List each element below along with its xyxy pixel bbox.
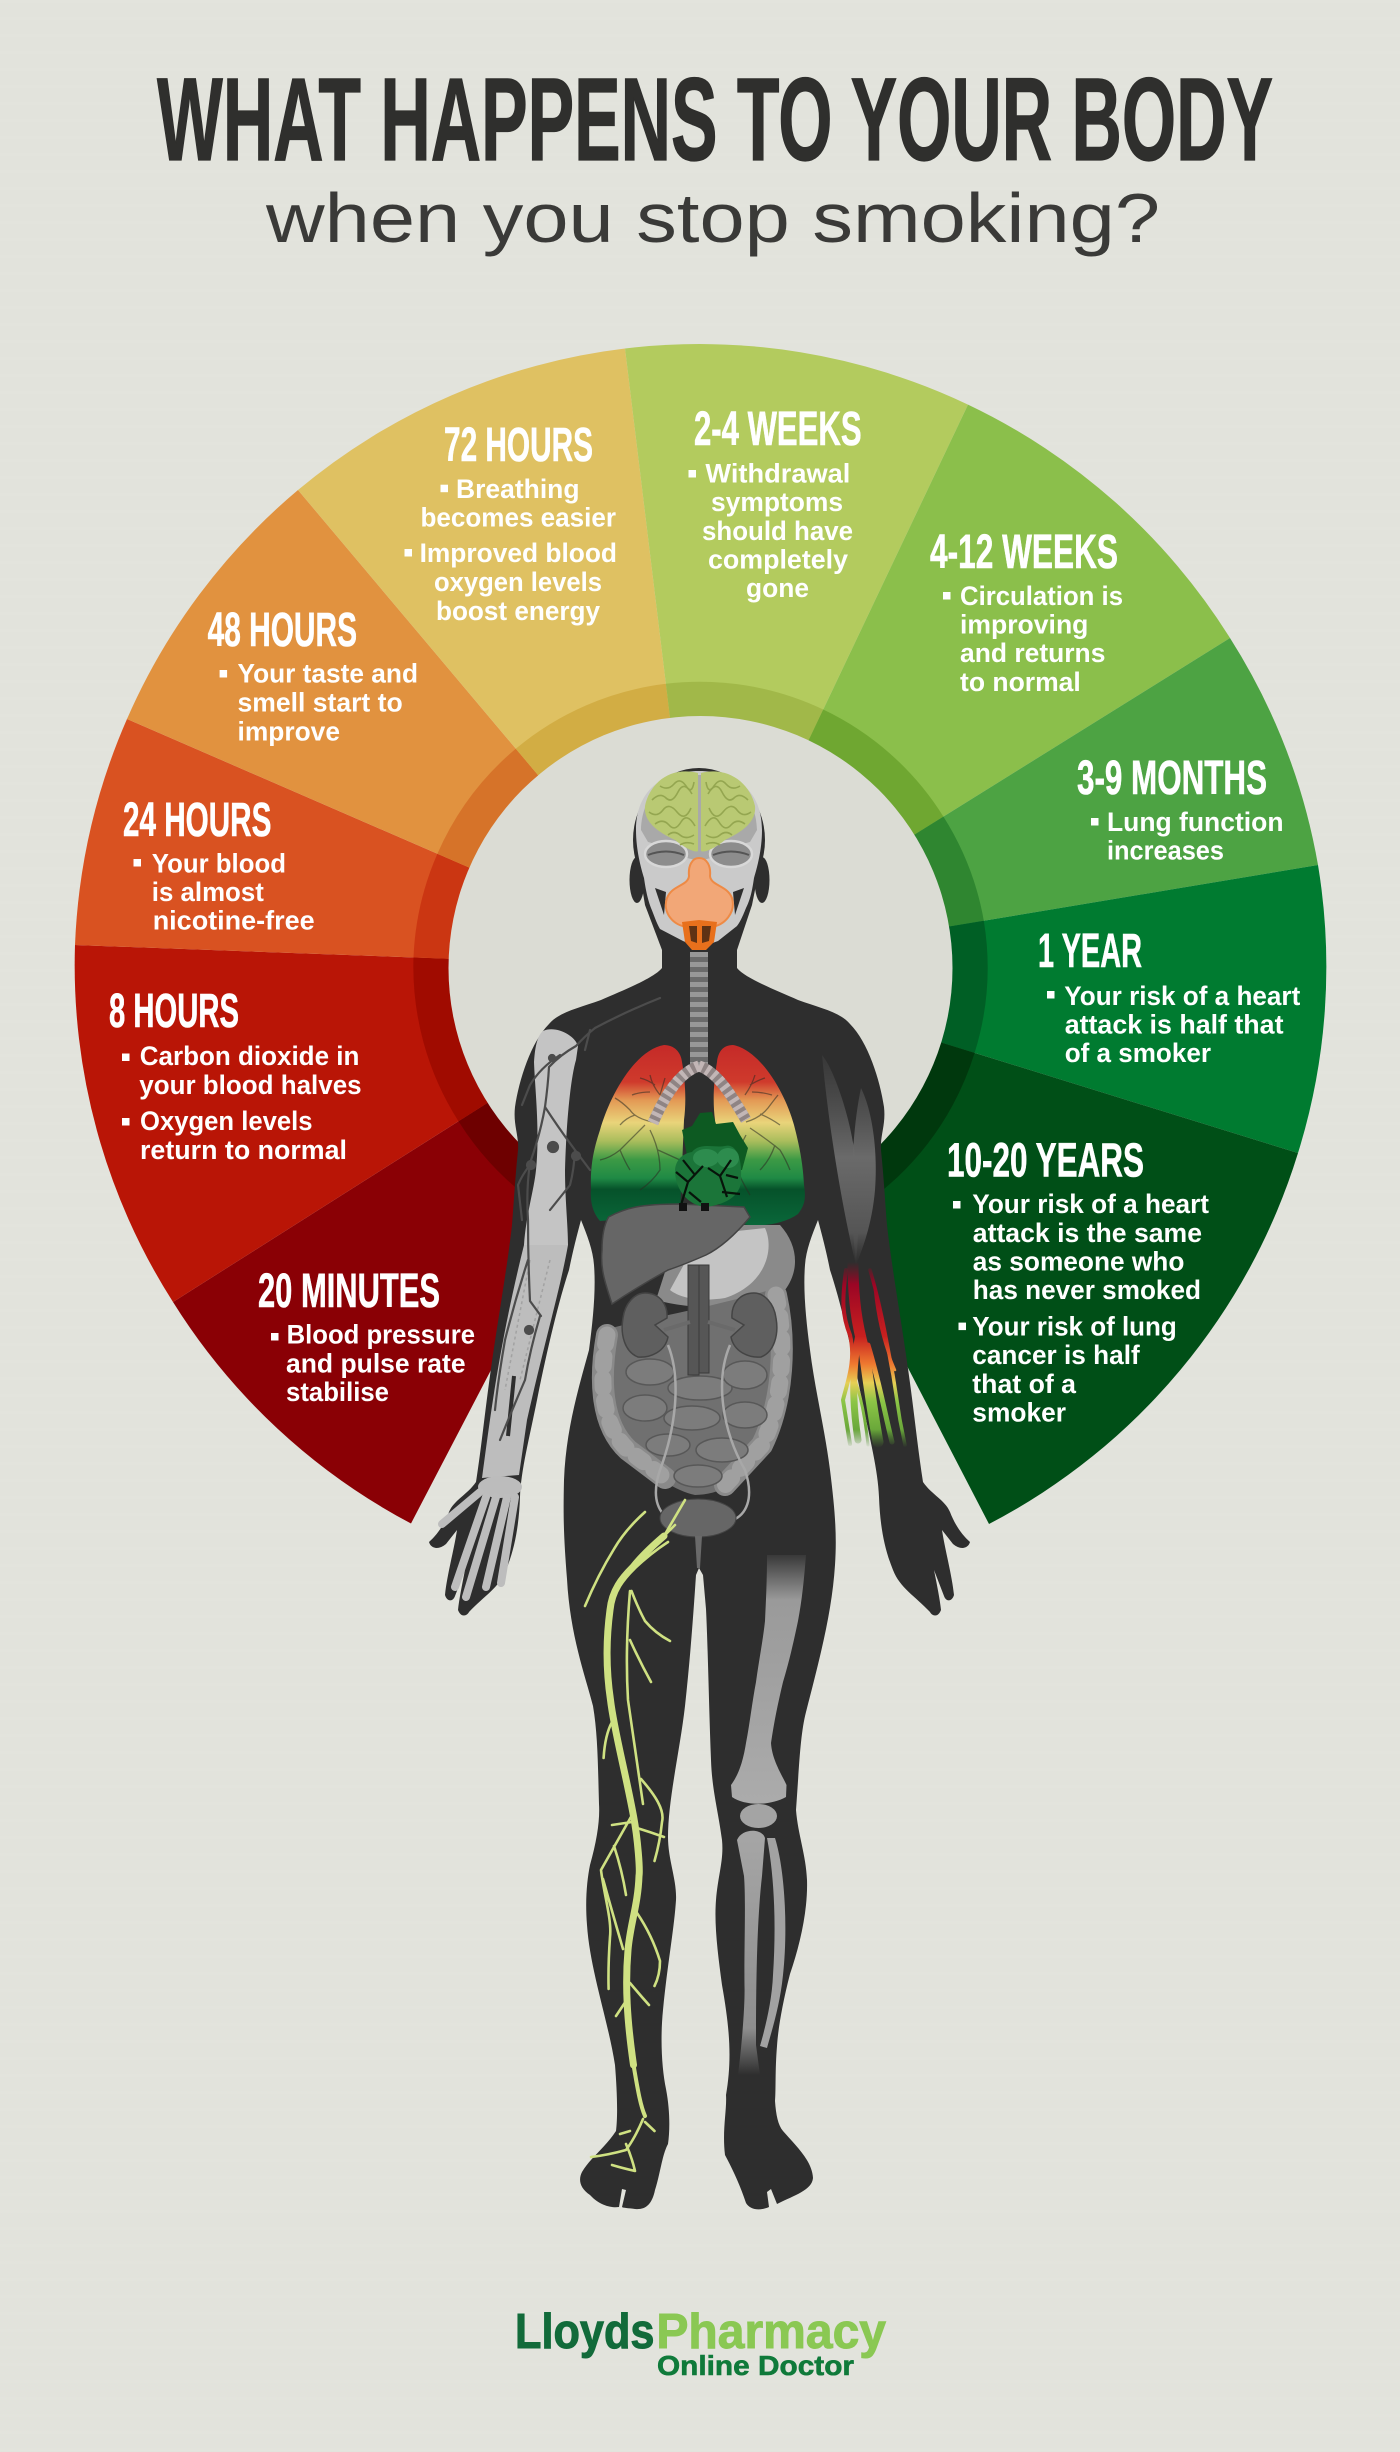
arm bones xyxy=(442,1029,578,1597)
heading: 10-20 years: 10-20 YEARS xyxy=(947,1134,1144,1188)
text: blood pressure: stabilise xyxy=(286,1377,389,1407)
bronchi xyxy=(653,1066,746,1123)
wedge: 48 hours xyxy=(127,490,700,968)
panel: 4-12 weeks xyxy=(700,405,1230,968)
text: carbon dioxide and oxygen: your blood halves xyxy=(139,1070,362,1100)
panel: 24 hours xyxy=(75,719,700,968)
text: long term risk: as someone who xyxy=(973,1247,1184,1277)
text: breathing and oxygen xyxy=(404,474,617,626)
wedge: 3-9 months xyxy=(700,638,1318,968)
text: taste and smell: Your taste and xyxy=(238,659,418,689)
tibia xyxy=(737,1831,765,2075)
text: withdrawal symptoms: completely xyxy=(708,544,848,574)
text: taste and smell xyxy=(220,659,418,746)
arm muscle xyxy=(822,1055,876,1265)
head and ears xyxy=(630,768,770,950)
text: carbon dioxide and oxygen: Oxygen levels xyxy=(140,1106,312,1136)
patella xyxy=(740,1804,777,1828)
wedge: 24 hours xyxy=(75,719,700,968)
text: blood pressure: and pulse rate xyxy=(286,1348,466,1378)
text: breathing and oxygen: boost energy xyxy=(436,596,600,626)
text: breathing and oxygen: Improved blood xyxy=(420,538,617,568)
text: long term risk: smoker xyxy=(972,1398,1066,1428)
stomach xyxy=(656,1225,795,1307)
logo: LloydsPharmacy xyxy=(515,2305,886,2359)
text: taste and smell: improve xyxy=(238,716,340,746)
text: long term risk: that of a xyxy=(972,1369,1077,1399)
panel: 2-4 weeks xyxy=(625,344,968,968)
femur xyxy=(731,1555,806,1804)
text: carbon dioxide and oxygen xyxy=(122,1041,362,1165)
logo: LloydsPharmacy: Pharmacy xyxy=(656,2305,886,2359)
small intestine xyxy=(623,1359,767,1487)
body silhouette xyxy=(429,944,970,2209)
ureters xyxy=(656,1345,749,1520)
kidneys xyxy=(622,1293,777,1357)
text: heart attack risk halved: of a smoker xyxy=(1065,1038,1211,1068)
wedge: 8 hours xyxy=(75,945,701,1302)
heading: 3-9 months: 3-9 MONTHS xyxy=(1077,752,1267,805)
nasal cavity xyxy=(666,858,733,950)
panel: 8 hours xyxy=(75,945,701,1302)
text: long term risk: has never smoked xyxy=(973,1275,1201,1305)
text: withdrawal symptoms: symptoms xyxy=(711,487,843,517)
wedge: 1 year xyxy=(700,865,1326,1153)
wedge: 20 minutes xyxy=(173,968,700,1524)
arm veins xyxy=(495,998,660,1440)
heading: 4-12 weeks: 4-12 WEEKS xyxy=(930,526,1118,579)
text: heart attack risk halved: attack is half that xyxy=(1065,1010,1284,1040)
text: withdrawal symptoms: Withdrawal xyxy=(705,459,850,489)
text: long term risk: attack is the same xyxy=(973,1218,1202,1248)
heading: 8 hours: 8 HOURS xyxy=(109,985,239,1038)
abdomen base xyxy=(601,1290,786,1495)
text: long term risk xyxy=(953,1189,1209,1428)
text: breathing and oxygen: becomes easier xyxy=(420,502,616,532)
heart xyxy=(675,1112,748,1211)
wedge: 2-4 weeks xyxy=(625,344,968,968)
liver xyxy=(602,1204,750,1304)
forearm vessels xyxy=(843,1262,905,1445)
wedge: 72 hours xyxy=(298,348,700,968)
text: lung function xyxy=(1091,807,1284,866)
text: nicotine-free xyxy=(134,848,315,936)
panel: 20 minutes xyxy=(173,968,700,1524)
text: long term risk: Your risk of lung xyxy=(972,1312,1177,1342)
panel: 1 year xyxy=(700,865,1326,1153)
text: breathing and oxygen: oxygen levels xyxy=(434,567,602,597)
text: circulation xyxy=(943,581,1123,697)
panel: 3-9 months xyxy=(700,638,1318,968)
text: long term risk: Your risk of a heart xyxy=(972,1189,1209,1219)
subtitle: when you stop smoking? xyxy=(265,179,1160,257)
text: nicotine-free: nicotine-free xyxy=(153,906,315,936)
text: lung function: increases xyxy=(1107,836,1224,866)
fibula xyxy=(760,1838,785,2048)
text: blood pressure: Blood pressure xyxy=(287,1320,475,1350)
lungs xyxy=(591,1045,805,1225)
inner circle xyxy=(448,716,952,1220)
leg nerves xyxy=(585,1500,685,2171)
text: circulation: to normal xyxy=(960,667,1081,697)
large intestine xyxy=(603,1295,782,1485)
text: heart attack risk halved: Your risk of a heart xyxy=(1064,981,1300,1011)
text: nicotine-free: is almost xyxy=(152,877,264,907)
text: circulation: and returns xyxy=(960,638,1105,668)
text: taste and smell: smell start to xyxy=(238,688,403,718)
text: circulation: improving xyxy=(960,610,1088,640)
heading: 1 year: 1 YEAR xyxy=(1038,925,1142,978)
trachea xyxy=(690,952,708,1066)
text: carbon dioxide and oxygen: Carbon dioxide in xyxy=(140,1041,359,1071)
text: withdrawal symptoms xyxy=(688,459,853,603)
skull xyxy=(636,771,762,948)
bladder xyxy=(660,1499,736,1568)
text: heart attack risk halved xyxy=(1047,981,1300,1068)
text: withdrawal symptoms: should have xyxy=(702,516,853,546)
heading: 72 hours: 72 HOURS xyxy=(444,419,593,472)
text: breathing and oxygen: Breathing xyxy=(456,474,580,504)
text: circulation: Circulation is xyxy=(960,581,1123,611)
heading: 2-4 weeks: 2-4 WEEKS xyxy=(694,403,862,456)
lung branches xyxy=(600,1075,790,1195)
text: withdrawal symptoms: gone xyxy=(746,573,809,603)
body figure xyxy=(429,768,970,2209)
text: long term risk: cancer is half xyxy=(972,1340,1141,1370)
text: nicotine-free: Your blood xyxy=(152,848,286,878)
panel: 10-20 years xyxy=(700,968,1298,1524)
panel: 48 hours xyxy=(127,490,700,968)
text: carbon dioxide and oxygen: return to normal xyxy=(140,1135,347,1165)
logo: Online Doctor: Online Doctor xyxy=(657,2350,854,2381)
heading: 48 hours: 48 HOURS xyxy=(208,604,357,657)
aorta xyxy=(688,1265,709,1375)
panel: 72 hours xyxy=(298,348,700,968)
wedge: 10-20 years xyxy=(700,968,1298,1524)
logo xyxy=(515,2305,886,2381)
heading: 20 minutes: 20 MINUTES xyxy=(258,1265,440,1318)
logo: LloydsPharmacy: Lloyds xyxy=(515,2305,654,2359)
brain xyxy=(645,771,755,851)
text: lung function: Lung function xyxy=(1107,807,1284,837)
heading: 24 hours: 24 HOURS xyxy=(123,794,271,847)
wedge: 4-12 weeks xyxy=(700,405,1230,968)
text: blood pressure xyxy=(271,1320,475,1407)
